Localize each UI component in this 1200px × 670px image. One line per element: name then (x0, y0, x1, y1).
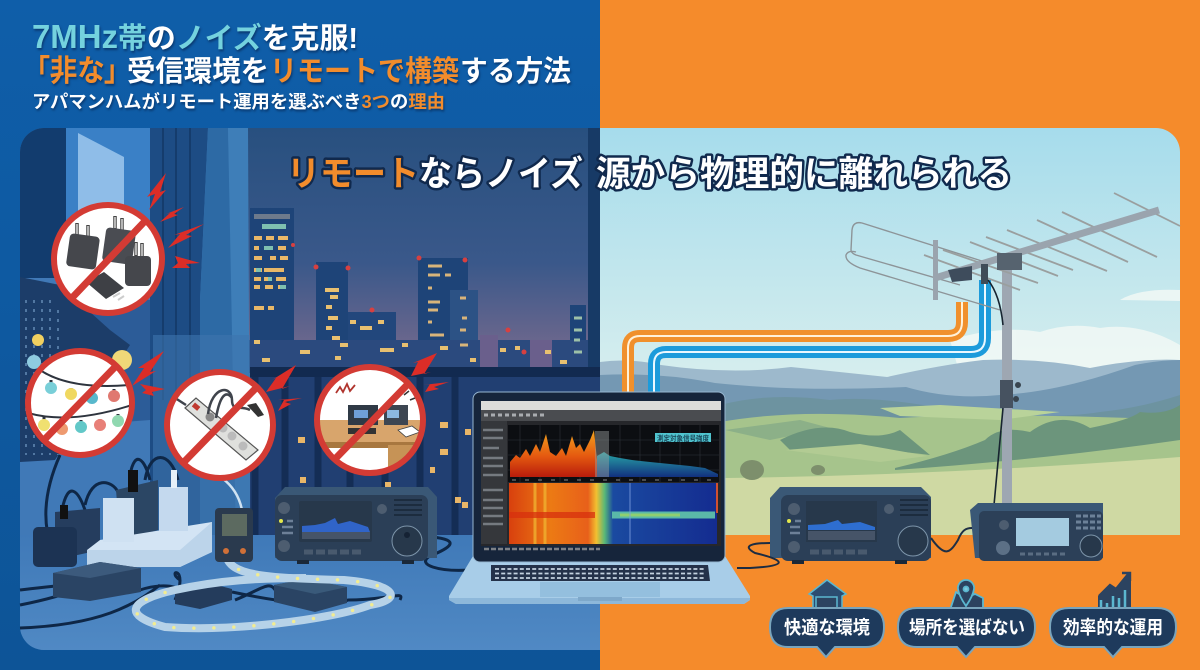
title line 2: 「非な」 (36, 55, 118, 88)
downlead (988, 280, 1003, 505)
title line 2: リモートで構築 (270, 55, 459, 88)
laptop bezel (473, 392, 725, 562)
icon: prohibited power strip (167, 372, 273, 478)
main heading: remote escapes noise sources (287, 154, 1012, 194)
icon: noise bolts around desk (411, 353, 449, 392)
sidebar controls (481, 421, 507, 544)
icon: prohibited chargers (54, 205, 162, 313)
benefit: comfortable environment: 快適な環境 (784, 617, 870, 638)
laptop-to-radio USB cable (737, 543, 779, 568)
balcony railing (250, 367, 600, 535)
title block (32, 18, 571, 112)
white adapters (103, 498, 134, 542)
benefit: comfortable environment (770, 580, 884, 657)
night sky and city skyline (248, 128, 600, 375)
rolling hills (600, 360, 1180, 535)
panel: countryside remote site (600, 128, 1180, 535)
curtains (150, 128, 250, 540)
benefit: any location (898, 580, 1035, 657)
desk surface (20, 535, 600, 650)
sky (600, 128, 1180, 377)
title line 2 (36, 55, 571, 88)
mast (1002, 263, 1012, 505)
white power strip (87, 522, 212, 567)
dark adapters (55, 508, 100, 560)
LED tape (136, 555, 391, 628)
radio transceiver: apartment (275, 487, 437, 564)
dark power bricks (53, 562, 347, 612)
icon: noise bolts around strip (266, 365, 302, 411)
radio transceiver: remote compact (970, 503, 1103, 561)
icon: prohibited cluttered radio desk (317, 367, 423, 477)
handheld meter (215, 508, 253, 562)
icon: map pin (950, 580, 983, 610)
fairy light glow (27, 334, 132, 370)
panel: noisy city apartment at night (20, 128, 600, 650)
laptop base and keyboard (449, 556, 750, 604)
icon: rising bar chart (1098, 573, 1131, 610)
status bar (484, 548, 600, 550)
clamp (1000, 380, 1013, 408)
loop elements (846, 223, 1000, 310)
director elements (924, 193, 1180, 290)
subtitle: アパマンハムがリモート運用を選ぶべき 3つの理由 (32, 91, 445, 112)
title line 1: 7MHz帯のノイズを克服! (32, 18, 358, 55)
icon: noise bolts around chargers (147, 173, 204, 268)
label pill (898, 608, 1035, 657)
icon: house with sofa (809, 580, 846, 610)
benefit: efficient operation: 効率的な運用 (1063, 617, 1163, 638)
spectrum display (508, 425, 719, 482)
laptop with SDR waterfall software (449, 392, 750, 604)
title and tool bars (481, 401, 721, 410)
main heading: remote escapes noise sources: リモートならノイズ (287, 154, 583, 194)
title line 2: する方法 (460, 55, 571, 88)
title line 2: 受信環境を (127, 55, 269, 88)
radio transceiver: remote main (770, 487, 931, 564)
feed lines: orange and blue coax from antenna to laptop (628, 280, 985, 395)
label pill (770, 608, 884, 657)
cluttered desk: power strip and adapters (20, 455, 470, 628)
main heading: remote escapes noise sources: 源から物理的に離れられる (596, 155, 1012, 194)
benefit: efficient operation (1050, 573, 1176, 657)
clouds (950, 290, 1180, 375)
power cables (20, 455, 470, 628)
spectrum display: 測定対象信号強度 (657, 433, 709, 443)
benefit: any location: 場所を選ばない (909, 617, 1025, 638)
icon: prohibited string lights (28, 351, 132, 455)
label pill (1050, 608, 1176, 657)
waterfall display (509, 483, 718, 544)
yagi antenna on mast (846, 193, 1180, 505)
radio link cable (931, 528, 972, 551)
wall and window frame (20, 128, 250, 650)
icon: noise bolts around lights (132, 351, 165, 396)
boom (935, 210, 1159, 278)
